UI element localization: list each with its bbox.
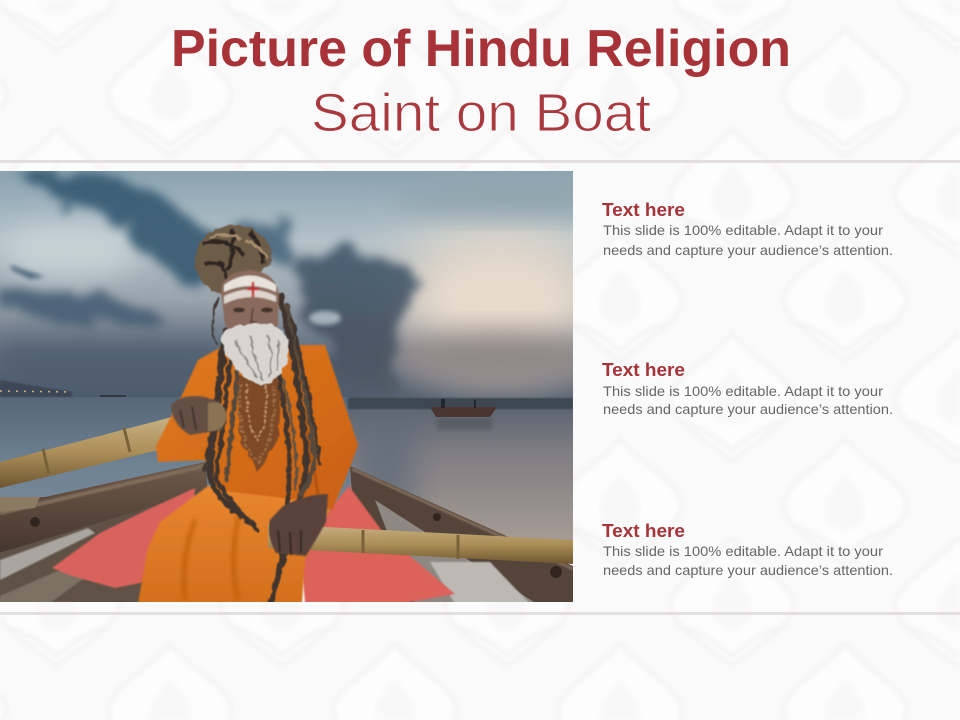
far shore right and small boat: [348, 398, 573, 430]
white beard: [222, 323, 289, 385]
text block 1: [602, 200, 893, 258]
text block 3: This slide is 100% editable. Adapt it to your: [603, 543, 883, 559]
sky with clouds: [0, 171, 573, 403]
face with tilak: [220, 270, 280, 329]
boat hull left: [0, 462, 208, 603]
text block 2: needs and capture your audience’s attention.: [603, 401, 893, 417]
pink cloth: [52, 486, 455, 603]
text block 1: Text here: [602, 200, 685, 220]
upper hand on oar: [171, 396, 227, 435]
far shore left: [0, 380, 126, 397]
text block 3: [602, 521, 893, 578]
text block 3: needs and capture your audience’s attention.: [603, 562, 893, 578]
photo: saint rowing a boat: [0, 171, 630, 604]
title: Picture of Hindu Religion: [171, 20, 791, 78]
hair bun: [195, 226, 272, 296]
text block 1: needs and capture your audience’s attention.: [603, 242, 893, 258]
upper oar: [0, 417, 180, 488]
lower robe: [138, 486, 330, 603]
text block 2: This slide is 100% editable. Adapt it to your: [603, 383, 883, 399]
boat hull right: [350, 466, 573, 604]
torso and arms: [156, 345, 358, 510]
necklace beads: [236, 375, 282, 472]
text block 1: This slide is 100% editable. Adapt it to your: [603, 222, 883, 238]
title: [171, 20, 791, 143]
river water: [0, 397, 573, 547]
lower oar: [268, 524, 573, 564]
hair locks: [205, 295, 320, 600]
text block 3: Text here: [602, 521, 685, 541]
title: Saint on Boat: [311, 83, 651, 143]
text block 2: Text here: [602, 360, 685, 380]
lower hand on oar: [269, 494, 328, 556]
text block 2: [602, 360, 893, 417]
